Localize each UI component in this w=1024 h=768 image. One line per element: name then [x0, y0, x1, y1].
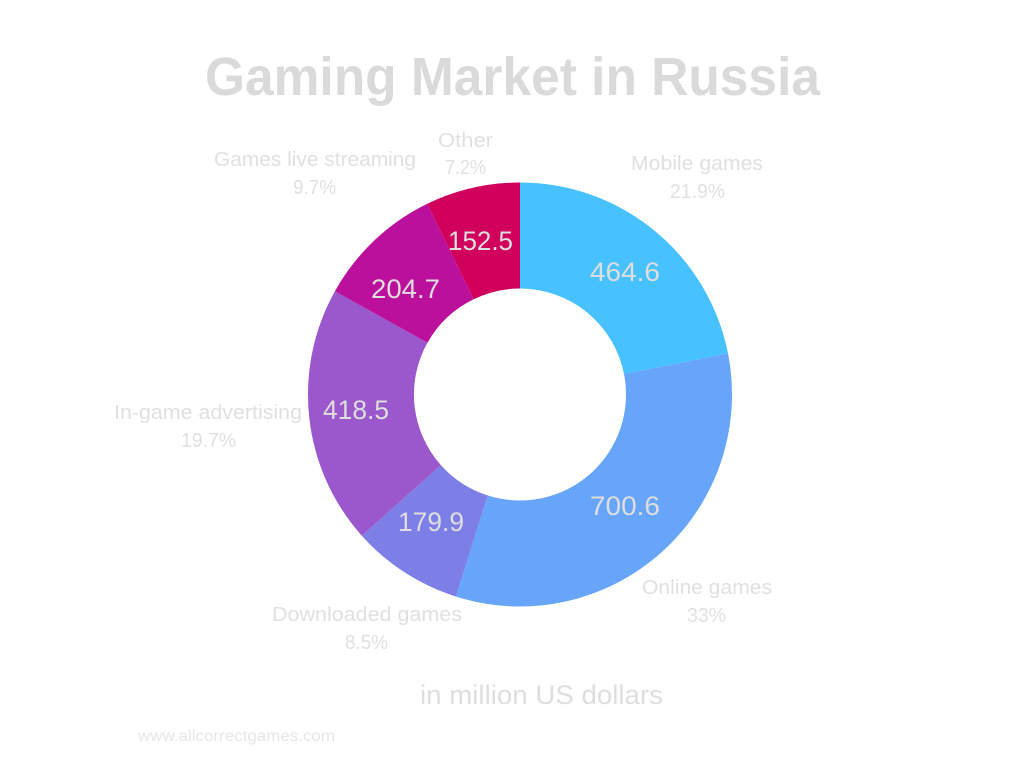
value: In-game advertising: 418.5 [323, 395, 389, 425]
value: Mobile games: 464.6 [590, 257, 660, 287]
label: Other: Other [438, 130, 493, 152]
label: In-game advertising: In-game advertising [114, 402, 302, 424]
label: Downloaded games: Downloaded games [272, 604, 462, 626]
slice: In-game advertising [308, 291, 441, 536]
label: In-game advertising [114, 402, 302, 452]
value: Other: 152.5 [448, 226, 513, 256]
unit note: in million US dollars [420, 680, 663, 710]
donut chart [308, 182, 732, 606]
label: Mobile games: 21.9% [670, 181, 725, 203]
label: Online games: Online games [642, 577, 772, 599]
source url: www.allcorrectgames.com [137, 728, 335, 745]
value: Downloaded games: 179.9 [398, 507, 464, 537]
title: Gaming Market in Russia [205, 47, 821, 107]
label: In-game advertising: 19.7% [181, 430, 236, 452]
label: Games live streaming [214, 149, 416, 199]
label: Games live streaming: Games live streaming [214, 149, 416, 171]
label: Downloaded games [272, 604, 462, 654]
slice: Online games [456, 354, 732, 606]
label: Games live streaming: 9.7% [293, 177, 336, 199]
value: Games live streaming: 204.7 [371, 274, 440, 304]
label: Downloaded games: 8.5% [345, 632, 388, 654]
slice: Mobile games [520, 182, 728, 374]
slice: Games live streaming [335, 204, 474, 343]
label: Online games: 33% [687, 605, 726, 627]
slice: Other [427, 182, 520, 299]
label: Other [438, 130, 493, 179]
label: Mobile games: Mobile games [631, 153, 763, 175]
label: Mobile games [631, 153, 763, 203]
slice: Downloaded games [362, 465, 488, 596]
label: Online games [642, 577, 772, 627]
label: Other: 7.2% [445, 157, 486, 179]
value: Online games: 700.6 [590, 491, 660, 521]
